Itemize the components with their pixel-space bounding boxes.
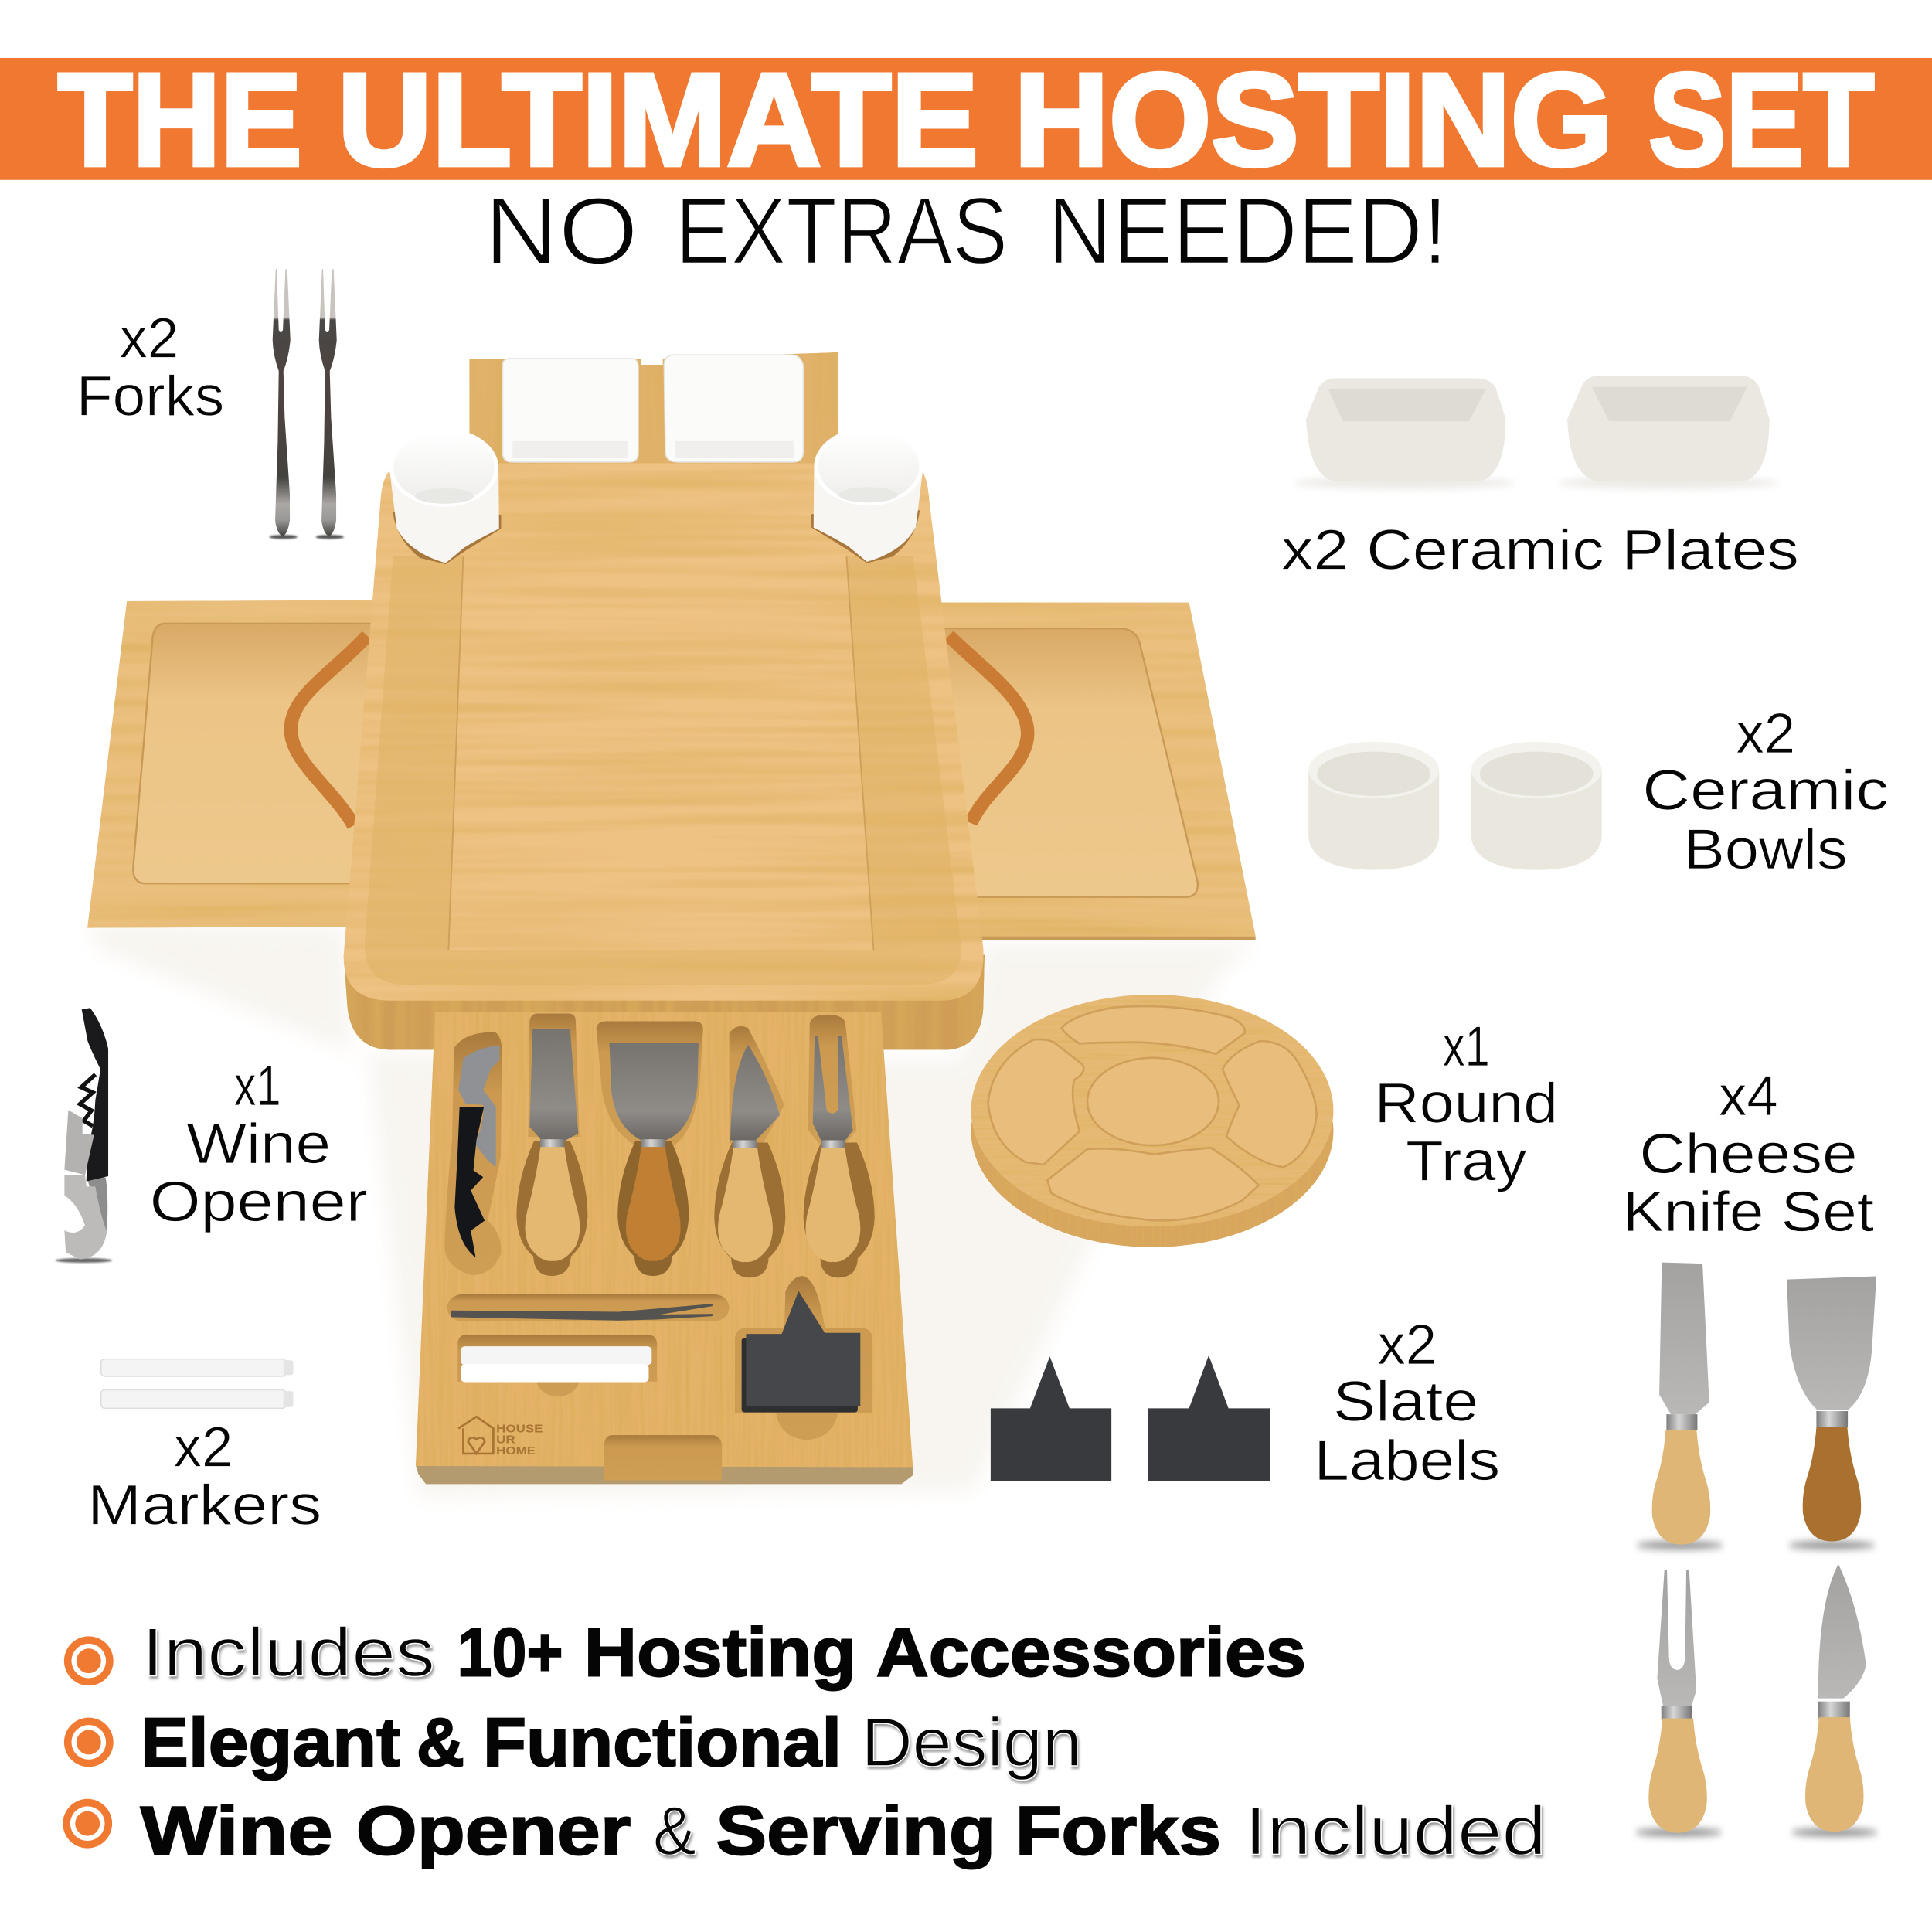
bullet row one [64,1613,1306,1690]
label: ceramic bowls: Ceramic [1642,759,1889,822]
spade knife [1787,1276,1876,1541]
label: round tray: Round [1375,1071,1558,1134]
title banner: THE [58,47,302,194]
label: cheese knife set: x4 [1719,1064,1778,1128]
spade knife [610,1043,699,1261]
slot: fork knife [804,1015,875,1277]
pointed knife [718,1045,780,1262]
icon: left ceramic bowl on board [389,428,501,564]
panel: back tray with ceramic plates [469,352,838,463]
label: slate labels: x2 [1378,1313,1437,1376]
title banner [0,47,1932,194]
label: round tray: Tray [1406,1129,1527,1192]
drawer logo [458,1417,543,1458]
bullet row two: Elegant [141,1703,400,1781]
label: ceramic bowls: Bowls [1684,818,1848,881]
bullet row two: Design [861,1703,1082,1781]
fork knife [806,1036,860,1262]
fork knife [1648,1570,1707,1833]
label: ceramic bowls [1642,702,1889,881]
drawer logo: HOME [496,1444,536,1458]
drawer front edge [416,1465,913,1484]
slot: markers [457,1335,657,1396]
shadows [1636,1541,1723,1549]
icon: two ceramic plates [1294,376,1779,489]
icon: four cheese knives [1634,1263,1878,1836]
subtitle: NEEDED! [1047,179,1447,284]
knife one [525,1029,580,1261]
icon: two markers [101,1359,293,1408]
markers in slot [461,1346,651,1383]
bullet list [63,1613,1546,1869]
panel: left side tray [87,600,400,928]
slot: pointed knife [714,1026,785,1277]
label: ceramic plates: x2 Ceramic Plates [1281,519,1799,582]
narrow knife [1652,1263,1710,1545]
corkscrew opener [454,1046,500,1257]
panel: main bamboo board [344,463,985,1049]
bullet row three: Opener [356,1792,631,1869]
label: round tray: x1 [1443,1015,1490,1078]
slot: corkscrew [444,1032,502,1275]
label: wine opener [150,1054,368,1233]
bullet row one: Accessories [876,1613,1306,1690]
title banner: SET [1648,47,1874,194]
label: markers [87,1415,321,1536]
juice groove [365,556,961,985]
bullet row three: Included [1244,1792,1546,1869]
panel: right side tray [918,603,1256,940]
label: forks: x2 [120,306,179,369]
subtitle [485,179,1447,284]
label: slate labels [1314,1313,1500,1492]
drawer top surface [416,1012,913,1467]
panel: pull-out drawer with tools [416,1012,913,1484]
label: wine opener: Wine [187,1112,331,1175]
label: cheese knife set: Knife Set [1623,1180,1874,1243]
label: round tray [1375,1015,1558,1192]
bullet row three: & [653,1792,696,1869]
slot: spade knife [597,1021,703,1276]
title banner: ULTIMATE [338,47,978,194]
bullet row one: Hosting [584,1613,856,1690]
bullet row two [64,1703,1082,1781]
board front side [344,955,985,1049]
bullet row one: Includes [141,1613,435,1690]
label: markers: x2 [174,1415,233,1478]
slot: long fork [447,1294,730,1321]
bullet row three [63,1792,1546,1869]
label: wine opener: Opener [150,1170,368,1233]
title banner: HOSTING [1014,47,1613,194]
icon: right ceramic bowl on board [811,427,923,563]
long fork in slot [451,1304,713,1321]
label: wine opener: x1 [234,1054,281,1117]
bullet row two: & [417,1703,464,1781]
slot: knife one [516,1014,587,1276]
label: forks: Forks [77,364,224,427]
slate label stack [742,1291,860,1413]
icon: round tray [971,995,1333,1247]
label: slate labels: Labels [1314,1429,1500,1492]
icon: two slate labels [991,1355,1270,1481]
bullet row three: Wine [141,1792,332,1869]
label: cheese knife set: Cheese [1639,1122,1858,1185]
pointed knife [1805,1564,1866,1832]
bullet row three: Serving [716,1792,995,1869]
bullet row one: 10+ [457,1613,563,1690]
drawer logo: UR [496,1433,515,1446]
bullet row two: Functional [483,1703,842,1781]
slot: slate labels [735,1276,872,1440]
icon: two ceramic bowls [1308,742,1602,870]
label: slate labels: Slate [1333,1369,1478,1433]
subtitle: NO [485,179,638,284]
strap: right leather handle [949,636,1028,823]
label: ceramic bowls: x2 [1736,702,1795,765]
label: forks [77,306,224,427]
icon: two forks [269,269,344,539]
subtitle: EXTRAS [675,179,1008,284]
drawer logo: HOUSE [496,1422,543,1435]
finger pull notch [604,1435,722,1481]
label: cheese knife set [1623,1064,1874,1243]
icon: wine opener [56,1008,112,1263]
bullet row three: Forks [1015,1792,1221,1869]
board top surface [344,463,983,1001]
strap: left leather handle [291,636,367,825]
board soft shadow [87,924,1257,1497]
label: markers: Markers [87,1473,321,1536]
